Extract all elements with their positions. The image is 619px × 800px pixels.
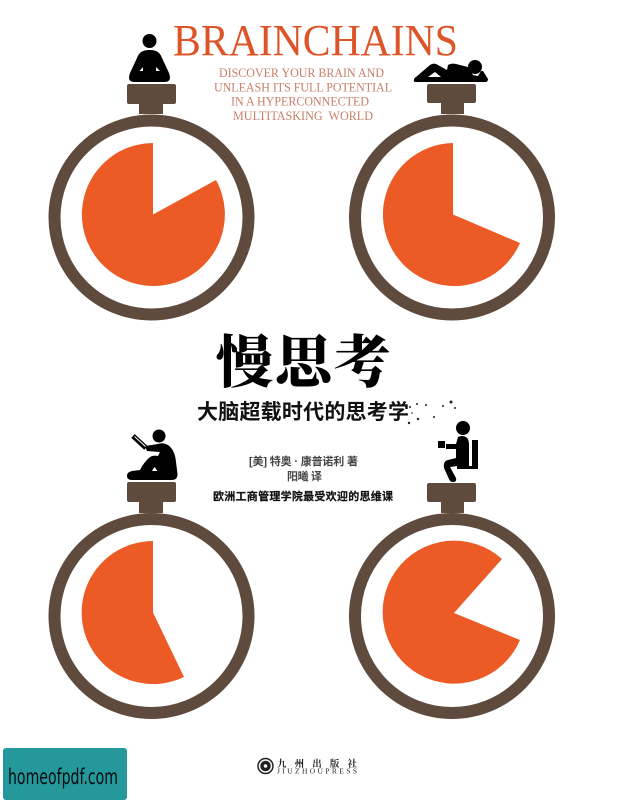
panel: stopwatch bottom left — [54, 482, 248, 713]
title: BRAINCHAINS: BRAINCHAINS — [173, 16, 458, 65]
text block: author: [美] 特奥 · 康普诺利 著 — [249, 454, 358, 468]
badge: homeofpdf.com: homeofpdf.com — [8, 765, 118, 789]
text block: English subtitle: DISCOVER YOUR BRAIN AND — [219, 65, 384, 80]
text block: English subtitle — [214, 65, 392, 123]
heading: Chinese subtitle: 大脑超载时代的思考学 — [197, 400, 409, 424]
pie: orange time segment — [82, 143, 225, 286]
icon: meditating person — [129, 34, 170, 82]
stopwatch crown — [127, 482, 176, 513]
text block: publisher name — [277, 758, 357, 776]
stopwatch crown — [427, 483, 476, 513]
icon: person seated with a cup — [438, 421, 478, 482]
stopwatch crown — [427, 84, 476, 114]
text block: English subtitle: IN A HYPERCONNECTED — [231, 94, 369, 108]
stopwatch ring — [355, 519, 549, 713]
text block: translator: 阳曦 译 — [287, 469, 322, 483]
decorative dots — [408, 400, 456, 424]
stopwatch ring — [355, 120, 549, 314]
text block: tagline: 欧洲工商管理学院最受欢迎的思维课 — [213, 489, 393, 503]
text block: publisher name: JIUZHOUPRESS — [277, 766, 357, 776]
heading: Chinese title: 慢思考 — [216, 332, 391, 395]
text block: publisher name: 九州出版社 — [277, 758, 357, 770]
pie: orange time segment — [82, 541, 184, 684]
text block: English subtitle: UNLEASH ITS FULL POTENTIAL — [214, 80, 392, 94]
panel: stopwatch top left — [54, 84, 248, 314]
pie: orange time segment — [383, 143, 520, 286]
panel: stopwatch top right — [355, 84, 549, 314]
stopwatch ring — [54, 519, 248, 713]
icon: person reading a book — [127, 430, 178, 480]
badge: homeofpdf.com — [3, 748, 127, 800]
pie: orange time segment — [383, 541, 520, 684]
panel: stopwatch bottom right — [355, 483, 549, 713]
stopwatch ring — [54, 120, 248, 314]
text block: English subtitle: MULTITASKING WORLD — [233, 108, 373, 123]
stopwatch crown — [127, 84, 176, 114]
icon: publisher emblem — [258, 758, 273, 774]
icon: person lying down — [414, 60, 488, 82]
